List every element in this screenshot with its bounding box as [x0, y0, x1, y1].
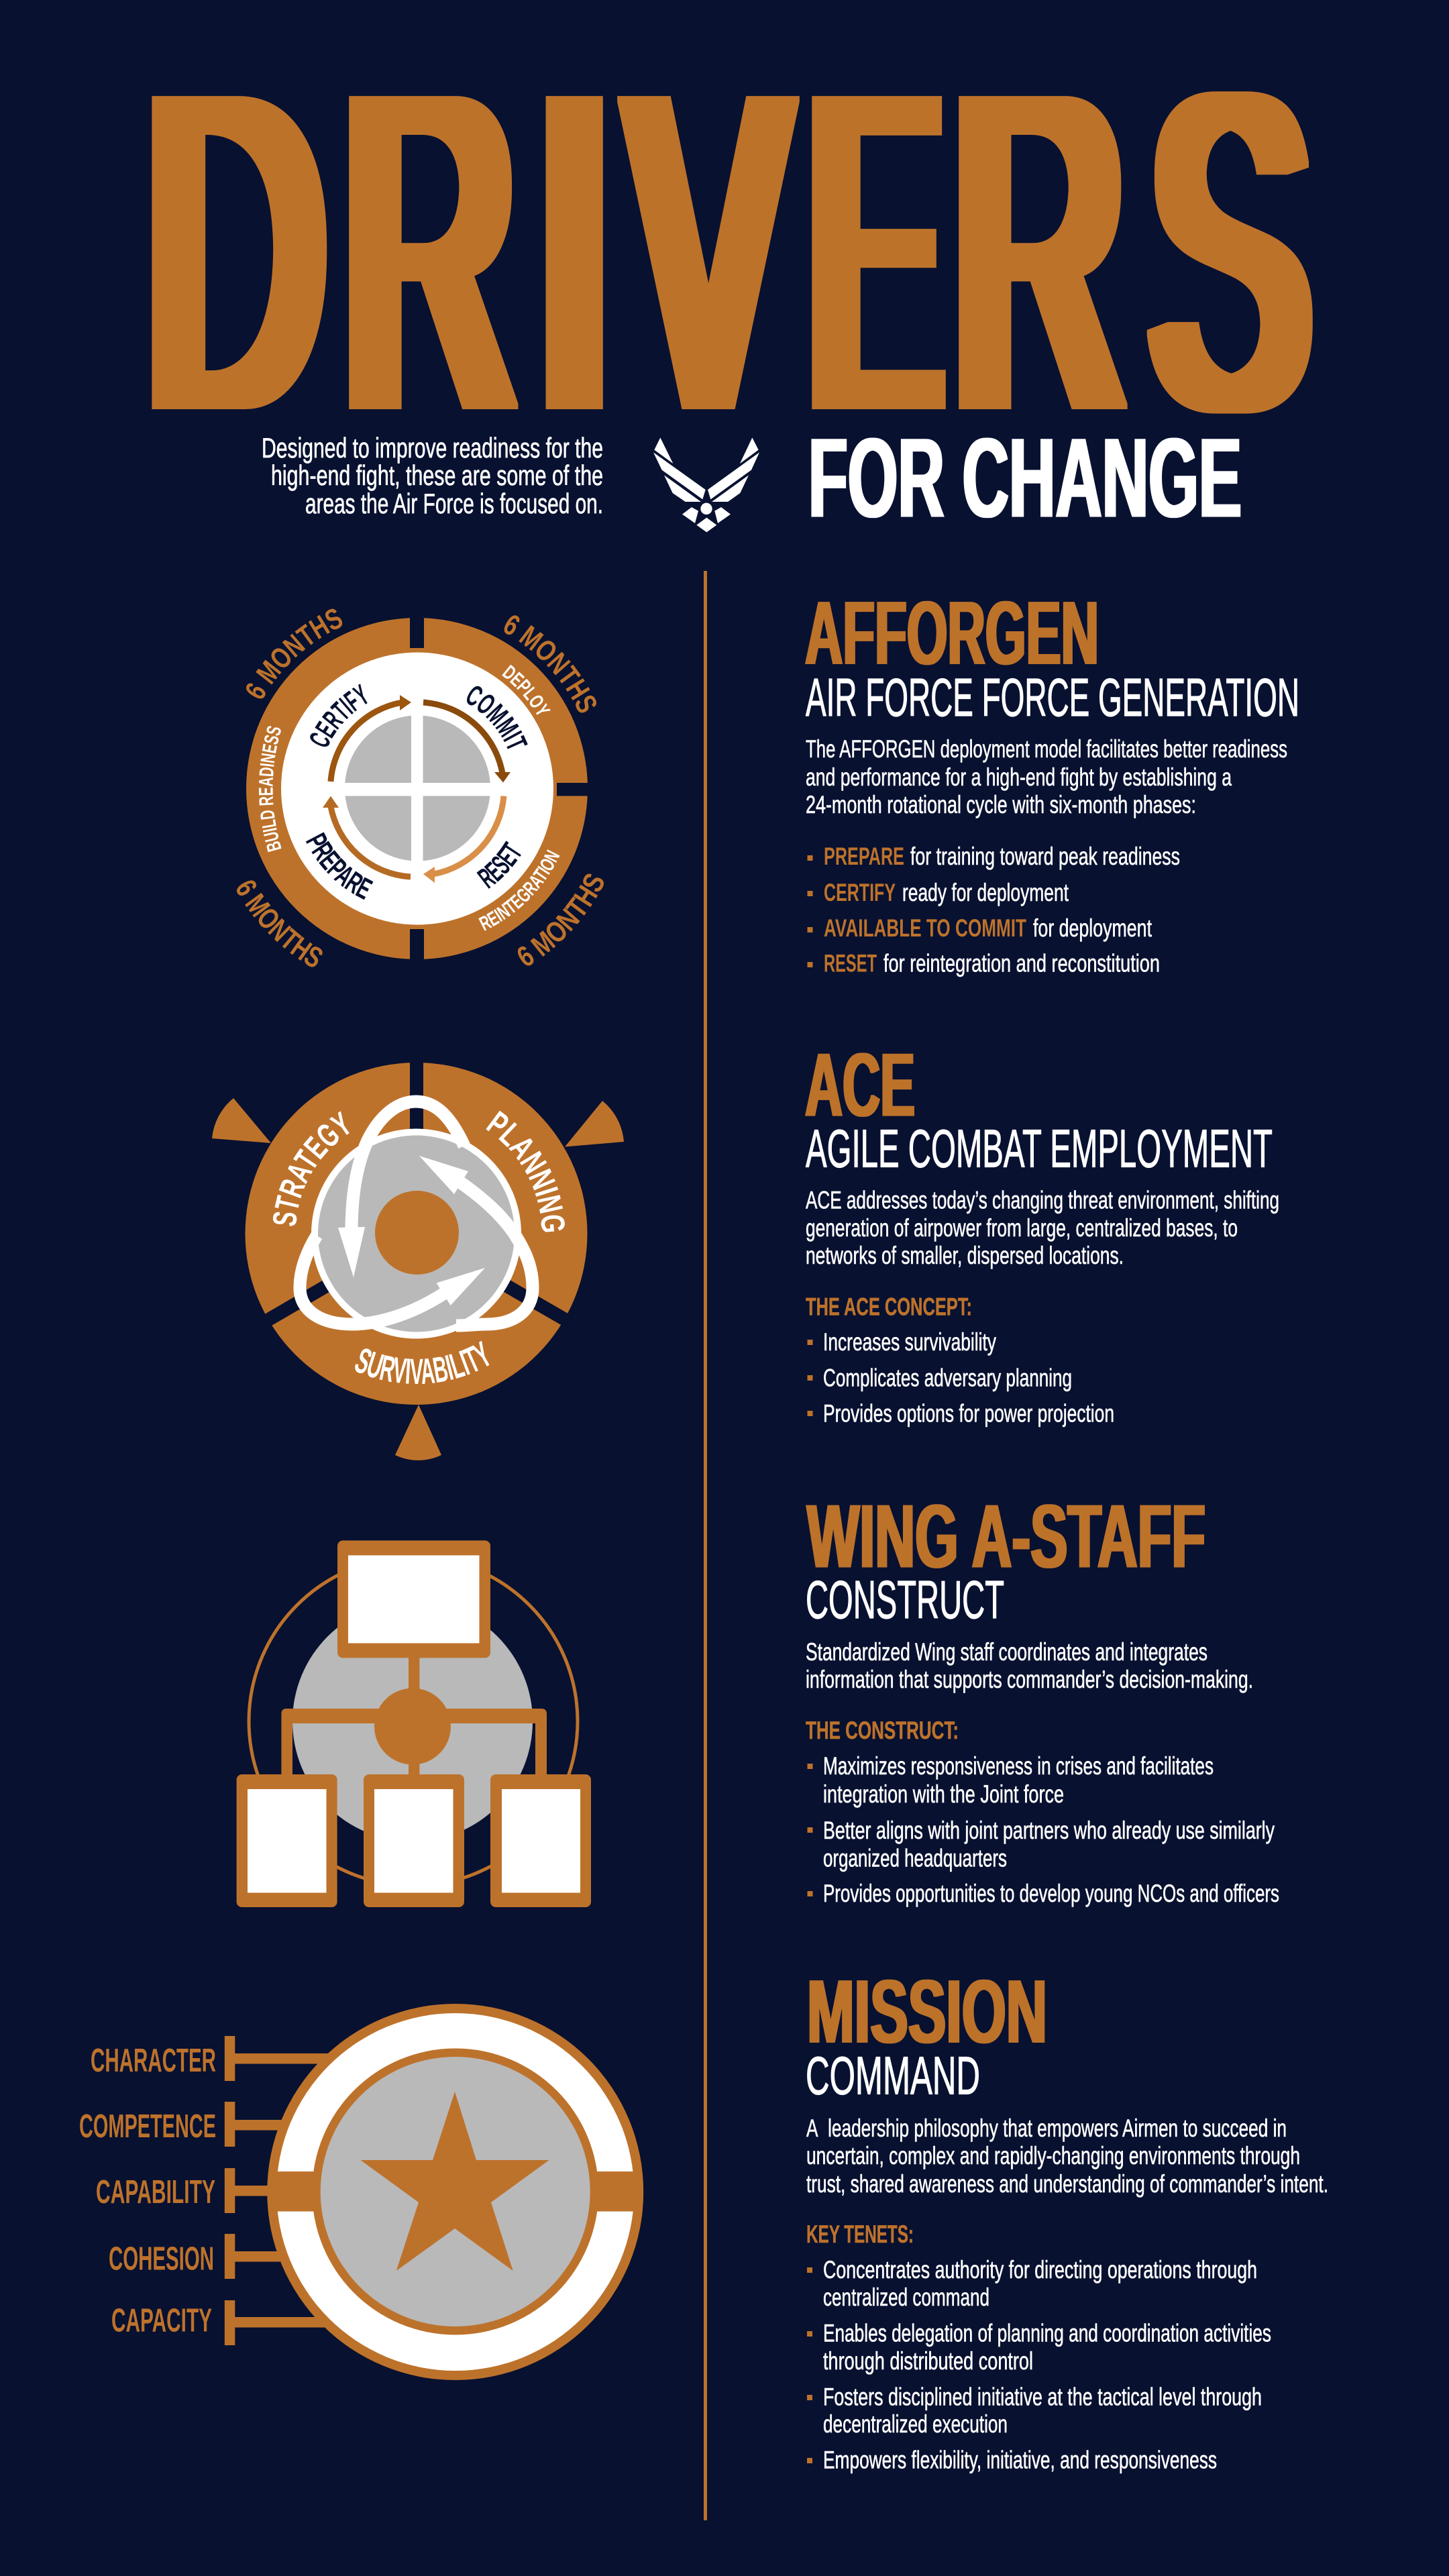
- icon: Mission Command shield: [225, 2004, 643, 2380]
- list heading: KEY TENETS:: [806, 2220, 914, 2248]
- arrow: reset: [423, 796, 504, 883]
- intro text: high-end fight, these are some of the: [271, 460, 603, 491]
- bullet list: [808, 1752, 1279, 1907]
- center divider line: [704, 571, 707, 2520]
- intro text: areas the Air Force is focused on.: [305, 488, 603, 519]
- body text: [806, 735, 1287, 818]
- icon: AFFORGEN cycle diagram: [237, 609, 604, 967]
- bullet list: Enables delegation of planning and coordination activities: [823, 2320, 1271, 2347]
- label: reset: RESET: [476, 841, 521, 889]
- list heading: THE CONSTRUCT:: [806, 1717, 959, 1744]
- bullet list: organized headquarters: [823, 1845, 1007, 1872]
- box: left: [237, 1774, 337, 1907]
- label: survivability: SURVIVABILITY: [355, 1340, 490, 1385]
- bullet list: [807, 2256, 1271, 2474]
- title: DRIVERS: I: [535, 2, 614, 502]
- title: DRIVERS: E: [812, 2, 938, 502]
- body text: Standardized Wing staff coordinates and integrates: [806, 1638, 1208, 1666]
- title: DRIVERS: R: [955, 2, 1123, 502]
- body text: 24-month rotational cycle with six-month phases:: [806, 791, 1196, 818]
- label: prepare: PREPARE: [306, 832, 373, 900]
- title: DRIVERS: V: [632, 2, 786, 502]
- panel: ACE: [805, 1034, 1279, 1428]
- label: 6 months bottom right: 6 MONTHS: [518, 873, 604, 966]
- label: reintegration: REINTEGRATION: [478, 849, 559, 931]
- body text: generation of airpower from large, centralized bases, to: [806, 1214, 1238, 1242]
- bullet list: Better aligns with joint partners who already use similarly: [823, 1817, 1275, 1844]
- title: DRIVERS: S: [1152, 2, 1308, 502]
- intro text: [262, 432, 603, 519]
- body text: [806, 2114, 1328, 2198]
- satellite wedges: [212, 1098, 624, 1460]
- list heading: THE ACE CONCEPT:: [806, 1293, 972, 1321]
- bullet list: for reintegration and reconstitution: [883, 950, 1160, 977]
- bullet list: Concentrates authority for directing operations through: [823, 2256, 1257, 2284]
- title: DRIVERS: R: [345, 2, 514, 502]
- body text: [806, 1638, 1253, 1693]
- label: strategy: STRATEGY: [272, 1111, 350, 1226]
- label: 6 months bottom left: 6 MONTHS: [237, 880, 323, 967]
- icon: Air Force wings logo: [653, 437, 759, 532]
- bullet list: Provides options for power projection: [823, 1399, 1114, 1428]
- bullet list: CERTIFY: [824, 879, 896, 906]
- connector: competence: [225, 2102, 285, 2147]
- bullet list: Empowers flexibility, initiative, and responsiveness: [823, 2446, 1217, 2474]
- arrow: commit: [423, 702, 511, 782]
- connector: cohesion: [225, 2234, 285, 2279]
- bullet list: decentralized execution: [823, 2410, 1008, 2438]
- connector: character: [225, 2036, 329, 2081]
- intro text: Designed to improve readiness for the: [262, 432, 603, 464]
- heading: ACE: [805, 1034, 915, 1136]
- bullet list: for deployment: [1033, 914, 1152, 942]
- bullet list: RESET: [824, 950, 877, 977]
- bullet list: centralized command: [823, 2284, 989, 2311]
- heading: AFFORGEN: [805, 582, 1099, 684]
- box: middle: [364, 1774, 464, 1907]
- label: certify: CERTIFY: [310, 684, 368, 747]
- labels: Mission Command tenets: COHESION: [109, 2241, 214, 2277]
- star: [360, 2092, 549, 2271]
- body text: networks of smaller, dispersed locations.: [806, 1242, 1124, 1269]
- bullet list: AVAILABLE TO COMMIT: [824, 914, 1026, 942]
- labels: Mission Command tenets: COMPETENCE: [79, 2108, 216, 2145]
- arrow: certify: [331, 695, 411, 782]
- connector: capacity: [225, 2300, 329, 2345]
- label: commit: COMMIT: [467, 686, 528, 749]
- label: build readiness: BUILD READINESS: [259, 726, 282, 852]
- bullet list: PREPARE: [824, 843, 904, 870]
- connector: capability: [225, 2168, 272, 2213]
- labels: Mission Command tenets: CHARACTER: [91, 2043, 216, 2079]
- labels: Mission Command tenets: CAPACITY: [111, 2303, 212, 2339]
- icon: ACE diagram: [212, 1063, 624, 1460]
- bullet list: [808, 843, 1180, 977]
- body text: [806, 1186, 1279, 1269]
- bullet list: Maximizes responsiveness in crises and facilitates: [823, 1752, 1214, 1780]
- bullet list: [808, 1328, 1114, 1428]
- bullet list: Fosters disciplined initiative at the tactical level through: [823, 2383, 1262, 2411]
- labels: Mission Command tenets: CAPABILITY: [96, 2174, 215, 2210]
- title: DRIVERS: D: [148, 2, 323, 502]
- label: 6 months top right: 6 MONTHS: [504, 615, 596, 712]
- icon: Wing A-Staff org chart: [237, 1540, 591, 1907]
- box: commander: [337, 1540, 490, 1658]
- arrow: prepare: [323, 796, 411, 877]
- subheading: CONSTRUCT: [806, 1570, 1004, 1629]
- label: 6 months top left: 6 MONTHS: [246, 609, 342, 699]
- heading: MISSION: [807, 1961, 1047, 2062]
- body text: and performance for a high-end fight by establishing a: [806, 763, 1232, 791]
- loop arrows: [300, 1102, 533, 1326]
- bullet list: integration with the Joint force: [823, 1780, 1064, 1808]
- bullet list: Complicates adversary planning: [823, 1364, 1072, 1392]
- heading: WING A-STAFF: [807, 1485, 1205, 1587]
- bullet list: ready for deployment: [902, 879, 1069, 906]
- panel: Mission Command: [806, 1961, 1328, 2474]
- bullet list: for training toward peak readiness: [910, 843, 1180, 870]
- labels: Mission Command tenets: [79, 2043, 216, 2339]
- subheading: COMMAND: [806, 2046, 980, 2105]
- body text: information that supports commander’s decision-making.: [806, 1666, 1253, 1693]
- label: planning: PLANNING: [486, 1111, 565, 1232]
- bullet list: through distributed control: [823, 2347, 1033, 2375]
- box: right: [490, 1774, 591, 1907]
- label: deploy: DEPLOY: [502, 664, 551, 715]
- bullet list: Increases survivability: [823, 1328, 996, 1356]
- panel: AFFORGEN: [805, 582, 1299, 977]
- panel: Wing A-Staff: [806, 1485, 1279, 1907]
